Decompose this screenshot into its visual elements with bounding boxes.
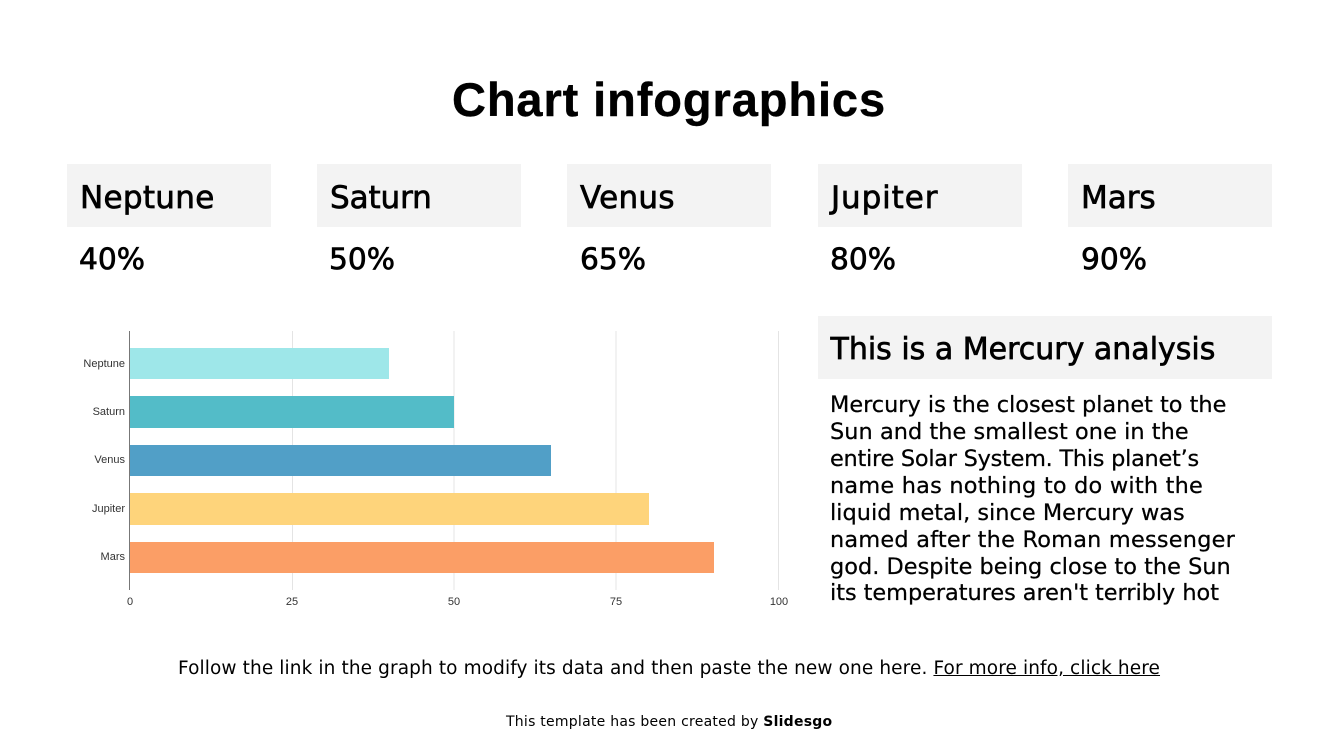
category labels: Saturn xyxy=(93,406,125,418)
axis labels: 0 xyxy=(127,596,133,608)
credit: This template has been created by Slidesgo xyxy=(506,714,832,730)
bar chart xyxy=(83,331,788,608)
text block: analysis: Mercury is the closest planet to the xyxy=(830,392,1226,418)
text block: analysis: Sun and the smallest one in the xyxy=(830,419,1189,445)
panel: Saturn xyxy=(317,164,520,227)
panel: Neptune: Neptune xyxy=(80,180,215,216)
title: Chart infographics xyxy=(452,73,886,126)
category labels: Jupiter xyxy=(92,503,125,515)
text block: analysis: liquid metal, since Mercury was xyxy=(830,500,1185,526)
value: Neptune: 40% xyxy=(79,242,145,276)
bar: Jupiter xyxy=(130,493,649,525)
axis labels xyxy=(127,596,788,608)
axis labels: 25 xyxy=(286,596,298,608)
value: Jupiter: 80% xyxy=(830,242,896,276)
panel: analysis heading xyxy=(818,316,1272,379)
panel: analysis heading: This is a Mercury analysis xyxy=(830,332,1215,367)
panel: Mars xyxy=(1068,164,1272,227)
panel: Jupiter xyxy=(818,164,1022,227)
panel: Saturn: Saturn xyxy=(330,180,432,216)
bar: Saturn xyxy=(130,396,454,428)
value: Venus: 65% xyxy=(580,242,646,276)
bar: Neptune xyxy=(130,348,389,379)
panel: Mars: Mars xyxy=(1081,180,1156,216)
footnote link text: Follow the link in the graph to modify its data and then paste the new one here. For more info, click here xyxy=(178,658,1160,679)
text block: analysis: named after the Roman messenger xyxy=(830,527,1235,553)
value: Saturn: 50% xyxy=(329,242,395,276)
panel: Neptune xyxy=(67,164,270,227)
category labels: Mars xyxy=(101,551,125,563)
panel: Venus xyxy=(567,164,770,227)
axis labels: 75 xyxy=(610,596,622,608)
panel: Jupiter: Jupiter xyxy=(831,180,938,216)
category labels: Neptune xyxy=(83,358,125,370)
axis labels: 50 xyxy=(448,596,460,608)
text block: analysis: god. Despite being close to the Sun xyxy=(830,554,1231,580)
text block: analysis: its temperatures aren't terribly hot xyxy=(830,580,1219,606)
category labels: Venus xyxy=(94,454,125,466)
category labels xyxy=(83,358,125,563)
panel: Venus: Venus xyxy=(580,180,675,216)
text block: analysis: name has nothing to do with the xyxy=(830,473,1203,499)
bar: Mars xyxy=(130,542,714,573)
value: Mars: 90% xyxy=(1081,242,1147,276)
bar: Venus xyxy=(130,445,551,476)
axis labels: 100 xyxy=(770,596,788,608)
text block: analysis: entire Solar System. This planet’s xyxy=(830,446,1199,472)
